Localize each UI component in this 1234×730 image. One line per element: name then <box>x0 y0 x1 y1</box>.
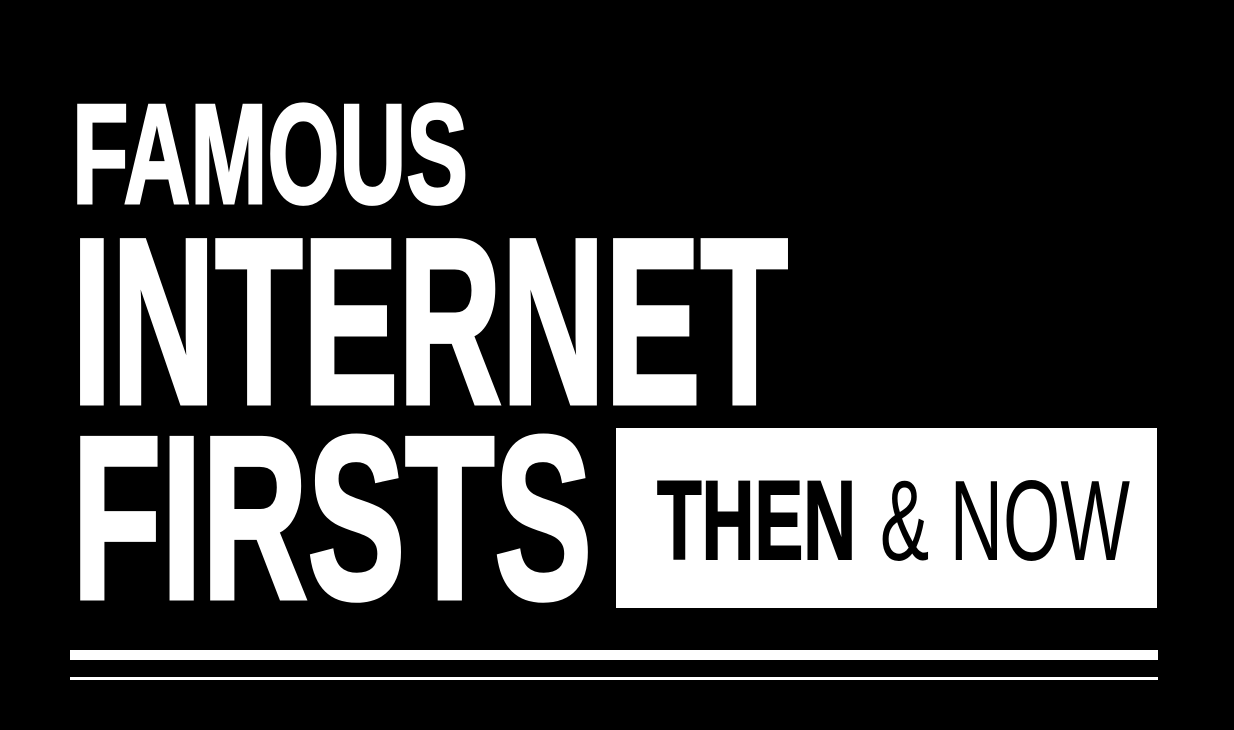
subtitle box: then & now <box>616 428 1157 608</box>
subtitle text THEN: THEN <box>657 458 856 583</box>
title line: INTERNET: INTERNET <box>72 190 788 454</box>
title line: FIRSTS: FIRSTS <box>72 389 592 648</box>
title line: FAMOUS: FAMOUS <box>72 75 468 234</box>
title <box>72 75 788 648</box>
